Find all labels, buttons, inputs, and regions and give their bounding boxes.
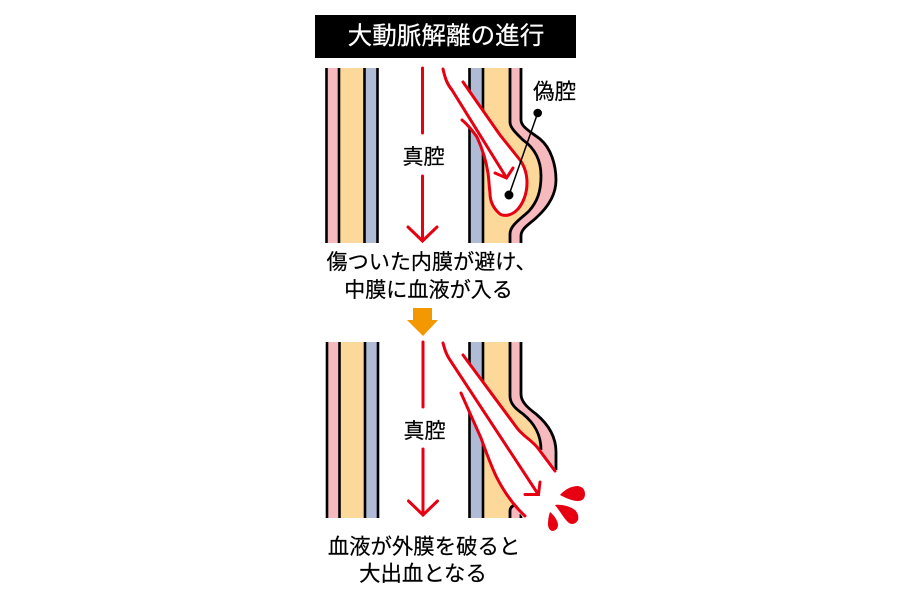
icon: blood drops xyxy=(548,486,585,531)
title: 大動脈解離の進行 xyxy=(348,22,544,50)
arrow: blood escaping xyxy=(443,343,540,494)
title xyxy=(315,15,576,58)
false lumen xyxy=(450,82,527,215)
label: false lumen xyxy=(504,80,576,200)
caption: early stage: 傷ついた内膜が避け、 xyxy=(327,250,536,274)
arrow: true lumen flow xyxy=(408,68,437,241)
caption: rupture stage: 血液が外膜を破ると xyxy=(328,535,520,559)
right vessel wall after rupture xyxy=(470,342,556,518)
right vessel wall with bulge xyxy=(470,68,556,243)
label: false lumen: 偽腔 xyxy=(533,80,576,104)
label: true lumen: 真腔 xyxy=(404,420,446,443)
torn false lumen xyxy=(450,355,600,520)
caption: early stage: 中膜に血液が入る xyxy=(344,278,513,302)
caption: rupture stage: 大出血となる xyxy=(359,562,487,586)
left vessel wall xyxy=(326,342,378,518)
label: true lumen: 真腔 xyxy=(402,146,444,169)
panel: rupture xyxy=(326,342,600,531)
arrow: true lumen flow xyxy=(408,342,438,515)
left vessel wall xyxy=(326,68,378,243)
arrow: progression xyxy=(407,308,438,336)
panel: early dissection xyxy=(326,68,576,243)
arrow: blood entering false lumen xyxy=(443,69,513,178)
